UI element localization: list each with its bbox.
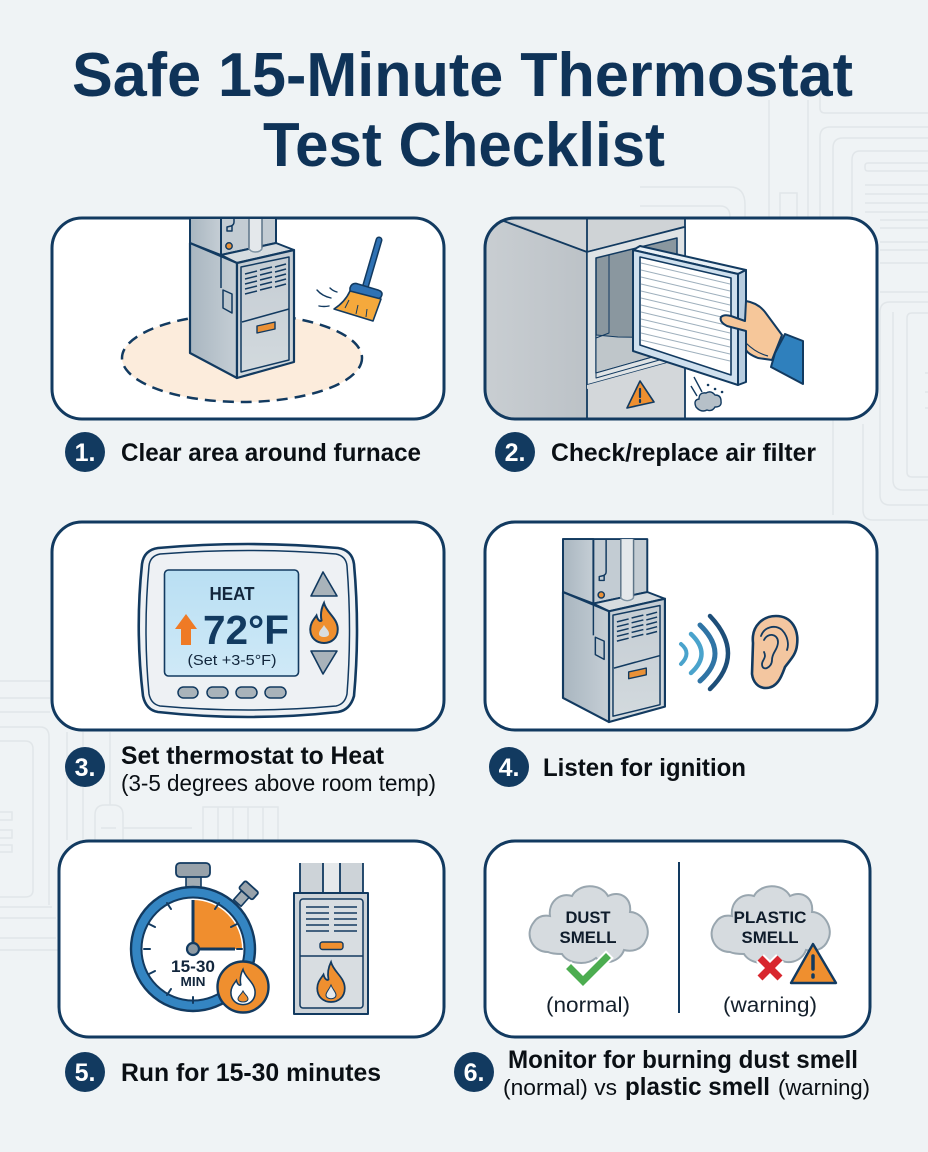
icon: warning triangle (627, 381, 654, 408)
step 3 label: 3. (75, 754, 95, 782)
panel: step 3 thermostat (52, 522, 444, 730)
step 6 label: plastic smell (625, 1073, 770, 1101)
step 6 label: Monitor for burning dust smell (508, 1046, 858, 1074)
furnace (188, 219, 296, 380)
panel: step 4 ignition (485, 522, 877, 730)
step 5 label: Run for 15-30 minutes (121, 1059, 381, 1087)
step 6 label: 6. (464, 1059, 484, 1087)
timer text (171, 957, 215, 989)
step 1 label (65, 432, 421, 472)
step 2 label: 2. (505, 439, 525, 467)
step 2 label: Check/replace air filter (551, 439, 816, 467)
normal caption: (normal) (546, 994, 630, 1017)
step 3 label: (3-5 degrees above room temp) (121, 770, 436, 796)
title: Safe 15-Minute Thermostat (72, 41, 853, 110)
icon: furnace flame (317, 962, 345, 1002)
title: Test Checklist (263, 111, 665, 180)
icon: plastic cloud: PLASTIC (734, 908, 806, 927)
panel: step 5 run time (59, 841, 444, 1037)
step 2 label (495, 432, 816, 472)
icon: broom (317, 240, 382, 321)
icon: flame (310, 603, 338, 643)
icon: sound waves (681, 616, 728, 689)
step 6 label (454, 1046, 870, 1101)
thermostat screen (164, 570, 298, 676)
icon: flame badge (218, 962, 268, 1012)
icon: green check (571, 958, 606, 981)
panel: step 2 air filter (484, 210, 877, 420)
icon: dust puff (691, 377, 722, 411)
furnace (563, 539, 665, 722)
step 1 label: Clear area around furnace (121, 439, 421, 467)
step 5 label (65, 1052, 381, 1092)
temperature value: 72°F (203, 607, 289, 653)
icon: ear (752, 616, 797, 688)
step 4 label (489, 747, 746, 787)
mode label: HEAT (210, 584, 254, 604)
step 3 label: Set thermostat to Heat (121, 742, 385, 770)
setpoint note: (Set +3-5°F) (188, 652, 276, 669)
icon: dust cloud (530, 886, 648, 963)
furnace front view (294, 863, 368, 1014)
icon: dust cloud: SMELL (560, 928, 616, 947)
step 6 label: (normal) vs (503, 1075, 617, 1100)
timer text: 15-30 (171, 957, 215, 976)
timer text: MIN (180, 974, 206, 989)
panel: step 6 smell comparison (485, 841, 870, 1037)
icon: plastic cloud (712, 886, 830, 963)
panel outline (485, 218, 877, 419)
icon: red cross (760, 958, 780, 978)
icon: warning triangle (791, 944, 836, 983)
control pills (178, 687, 286, 698)
step 4 label: Listen for ignition (543, 754, 746, 782)
warning caption: (warning) (723, 994, 817, 1017)
furnace cabinet with open filter slot (484, 210, 685, 420)
icon: hand holding filter (721, 301, 803, 384)
dashed clearance circle (122, 314, 362, 402)
step 5 label: 5. (75, 1059, 95, 1087)
step 4 label: 4. (499, 754, 519, 782)
icon: dust cloud: DUST (566, 908, 611, 927)
step 3 label (65, 742, 436, 796)
divider (678, 862, 680, 1013)
up and down buttons (311, 572, 337, 674)
icon: plastic cloud: SMELL (742, 928, 798, 947)
panel: step 1 clear area (50, 216, 446, 420)
thermostat body (139, 544, 357, 717)
arrow: temperature up (175, 614, 197, 645)
step 6 label: (warning) (778, 1075, 870, 1100)
title (72, 41, 853, 180)
step 1 label: 1. (75, 439, 95, 467)
air filter (633, 246, 746, 385)
icon: stopwatch (131, 863, 259, 1011)
